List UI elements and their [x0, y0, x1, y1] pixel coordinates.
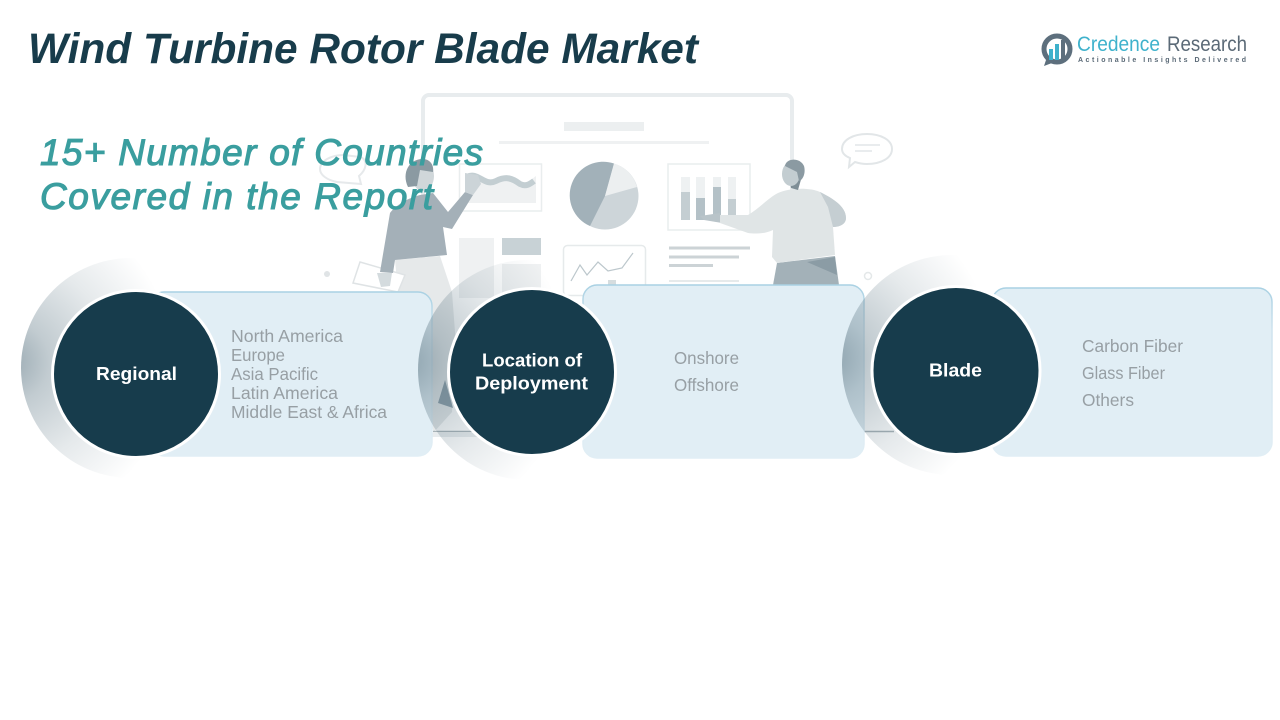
gradient crescent — [842, 255, 1062, 475]
line chart — [564, 246, 646, 296]
category label: Regional — [96, 363, 177, 384]
list of blade types: Carbon Fiber — [1082, 336, 1183, 356]
panel: Location of Deployment — [418, 260, 864, 480]
panel: Blade — [842, 255, 1272, 475]
list of blade types: Glass Fiber — [1082, 363, 1165, 383]
panel: Regional — [21, 258, 432, 478]
pie chart — [570, 162, 638, 230]
subtitle — [40, 132, 483, 217]
detail card — [583, 285, 864, 458]
list of regions: Middle East & Africa — [231, 402, 387, 422]
logo: Credence Research — [1044, 33, 1247, 66]
bar chart — [668, 164, 750, 230]
logo icon — [1044, 36, 1070, 66]
list of blade types: Others — [1082, 390, 1134, 410]
list of deployment types — [674, 348, 739, 395]
logo wordmark: Credence — [1077, 33, 1160, 56]
category label: Location of — [482, 350, 583, 370]
speech bubble right — [842, 134, 892, 167]
speech bubble left — [320, 155, 366, 184]
detail card — [992, 288, 1272, 456]
woman presenter — [353, 159, 481, 432]
gradient crescent — [418, 260, 638, 480]
text lines — [669, 246, 750, 282]
list of regions — [231, 326, 387, 422]
subtitle: Covered in the Report — [40, 176, 435, 217]
list of regions: North America — [231, 326, 343, 346]
logo tagline: Actionable Insights Delivered — [1078, 57, 1246, 64]
list of regions: Europe — [231, 345, 285, 365]
title: Wind Turbine Rotor Blade Market — [28, 25, 700, 73]
detail card — [150, 292, 432, 456]
monitor frame — [423, 95, 792, 435]
category label: Blade — [929, 360, 982, 380]
illustration: presentation monitor with two presenters — [320, 95, 894, 435]
logo wordmark: Research — [1167, 33, 1247, 56]
list of blade types — [1082, 336, 1183, 410]
wave chart — [460, 164, 542, 211]
gradient crescent — [21, 258, 241, 478]
list of regions: Latin America — [231, 383, 338, 403]
man presenter — [700, 160, 846, 285]
list of deployment types: Onshore — [674, 348, 739, 368]
blocks — [459, 238, 541, 298]
monitor heading placeholder — [564, 122, 644, 131]
category label — [475, 350, 588, 394]
floor line — [433, 430, 894, 432]
category circle — [872, 286, 1040, 454]
subtitle: 15+ Number of Countries — [40, 132, 483, 173]
category circle — [52, 290, 220, 458]
decorative dots — [324, 271, 872, 280]
category circle — [448, 288, 616, 456]
list of regions: Asia Pacific — [231, 364, 318, 384]
category label: Deployment — [475, 372, 588, 394]
list of deployment types: Offshore — [674, 375, 739, 395]
